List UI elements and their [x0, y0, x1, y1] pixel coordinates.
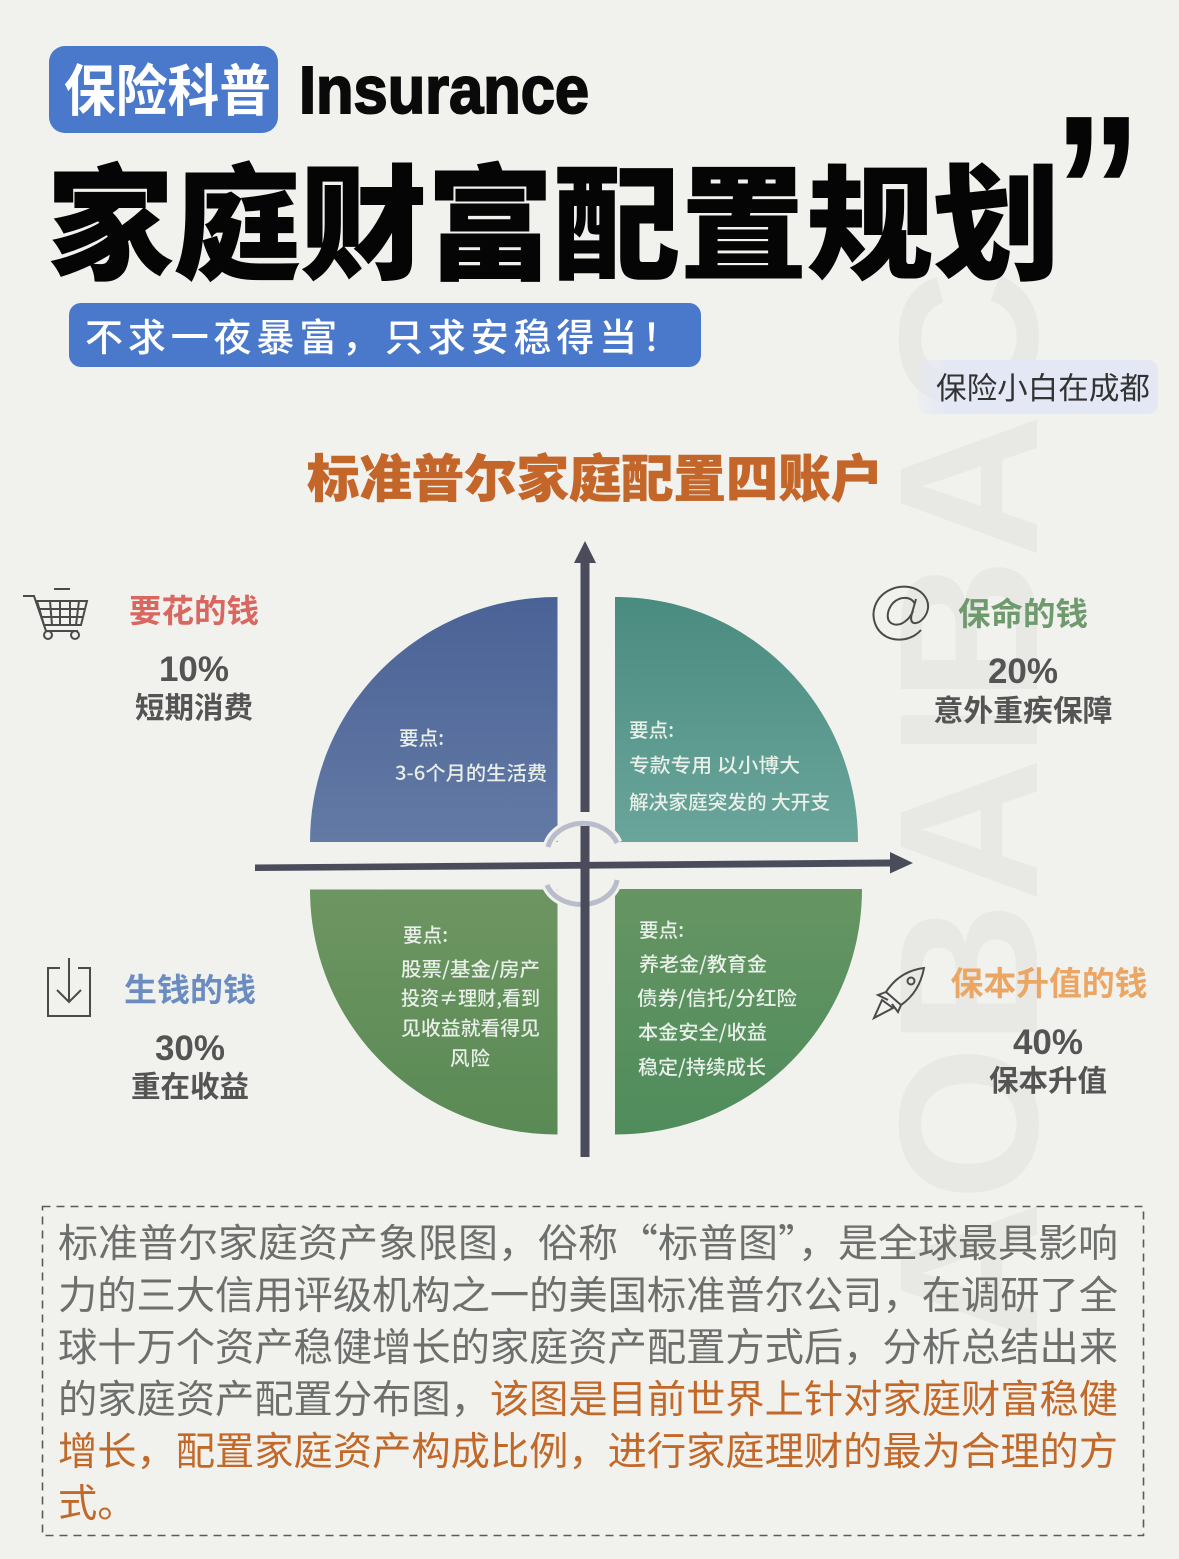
quadrant: 要花的钱 — [310, 597, 558, 842]
badge: 保险科普: 保险科普 — [64, 47, 271, 128]
icon: shopping cart — [23, 589, 87, 639]
quadrant chart — [255, 541, 913, 1157]
quadrant: 生钱的钱: 风险 — [450, 1042, 490, 1071]
label: 生钱的钱: 生钱的钱 — [124, 965, 256, 1011]
quote mark: ” — [1053, 70, 1142, 311]
quadrant: 生钱的钱: 股票/基金/房产 — [401, 953, 540, 982]
quadrant: 生钱的钱: 见收益就看得见 — [401, 1012, 540, 1041]
cycle arrows — [547, 823, 617, 904]
subtitle banner: 不求一夜暴富，只求安稳得当！ — [85, 307, 680, 362]
quadrant: 保本升值的钱: 养老金/教育金 — [639, 948, 768, 977]
description box: 球十万个资产稳健增长的家庭资产配置方式后，分析总结出来 — [58, 1316, 1118, 1373]
description box — [42, 1206, 1144, 1536]
quadrant: 保命的钱: 专款专用 以小博大 — [629, 749, 800, 778]
quadrant: 要花的钱: 要点: — [399, 722, 444, 751]
quadrant: 保命的钱: 解决家庭突发的 大开支 — [629, 786, 830, 815]
description box: 的家庭资产配置分布图，该图是目前世界上针对家庭财富稳健 — [58, 1368, 1118, 1425]
label: 要花的钱: 短期消费 — [135, 685, 253, 727]
description box: 标准普尔家庭资产象限图，俗称“标普图”，是全球最具影响 — [58, 1212, 1118, 1269]
quadrant: 保本升值的钱 — [615, 889, 862, 1134]
label: 保命的钱 — [874, 587, 1112, 730]
label: 要花的钱: 要花的钱 — [129, 586, 259, 632]
label: 要花的钱: 10% — [159, 650, 229, 689]
label: 生钱的钱: 重在收益 — [131, 1064, 249, 1106]
watermark: AOBAIBAC — [858, 270, 1079, 1345]
label: 生钱的钱 — [48, 958, 256, 1106]
vertical axis arrow — [574, 541, 596, 1157]
label: 保本升值的钱: 40% — [1013, 1023, 1083, 1062]
heading: Insurance: Insurance — [299, 53, 589, 128]
description box: 增长，配置家庭资产构成比例，进行家庭理财的最为合理的方 — [58, 1420, 1118, 1477]
author tag: 保险小白在成都 — [936, 364, 1150, 408]
label: 保本升值的钱 — [874, 957, 1148, 1100]
quadrant: 要花的钱: 3-6个月的生活费 — [395, 757, 547, 786]
description box: 力的三大信用评级机构之一的美国标准普尔公司，在调研了全 — [58, 1264, 1118, 1321]
icon: rocket — [874, 968, 924, 1018]
main title: 家庭财富配置规划 — [47, 125, 1060, 305]
label: 保本升值的钱: 保本升值的钱 — [950, 957, 1148, 1005]
description box: 式。 — [58, 1472, 137, 1529]
label: 生钱的钱: 30% — [155, 1029, 225, 1068]
horizontal axis arrow — [255, 852, 913, 874]
icon: at sign — [874, 587, 928, 640]
label: 保本升值的钱: 保本升值 — [989, 1058, 1107, 1100]
label: 保命的钱: 保命的钱 — [958, 589, 1088, 635]
quadrant: 生钱的钱: 投资≠理财,看到 — [401, 982, 540, 1011]
quadrant: 生钱的钱 — [310, 890, 558, 1134]
chart heading: 标准普尔家庭配置四账户 — [307, 438, 883, 512]
label: 保命的钱: 意外重疾保障 — [934, 688, 1112, 730]
quadrant: 保命的钱 — [615, 597, 858, 842]
quadrant: 保命的钱: 要点: — [629, 714, 674, 743]
label: 保命的钱: 20% — [988, 652, 1058, 691]
quadrant: 保本升值的钱: 稳定/持续成长 — [638, 1051, 766, 1080]
quadrant: 保本升值的钱: 债券/信托/分红险 — [637, 982, 798, 1011]
quadrant: 生钱的钱: 要点: — [403, 919, 448, 948]
quadrant: 保本升值的钱: 本金安全/收益 — [638, 1016, 767, 1045]
icon: download box — [48, 958, 90, 1016]
label: 要花的钱 — [23, 586, 259, 727]
quadrant: 保本升值的钱: 要点: — [639, 914, 684, 943]
